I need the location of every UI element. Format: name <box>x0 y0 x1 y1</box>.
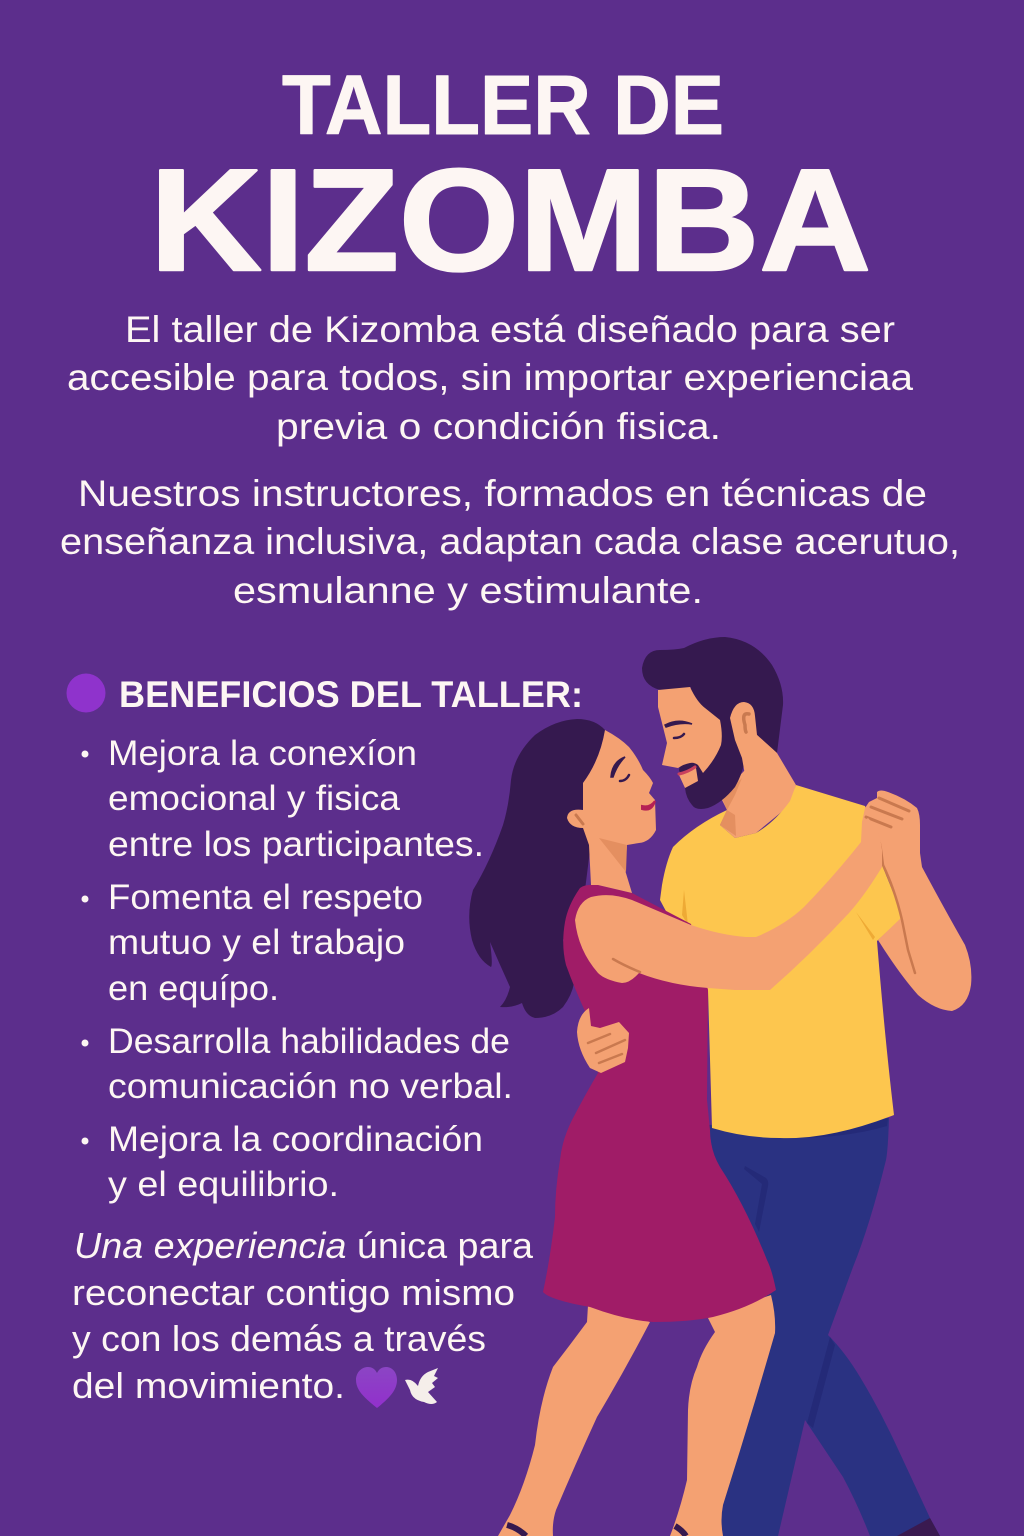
title: TALLER DE <box>282 58 724 152</box>
man's hair and beard <box>642 637 783 809</box>
benefit 3: Desarrolla habilidades de <box>108 1022 510 1061</box>
benefit 2 <box>82 878 423 1008</box>
closing message: Una experiencia única para <box>74 1225 534 1266</box>
icon: purple heart <box>356 1367 397 1408</box>
woman's sandals <box>507 1525 686 1536</box>
woman's arm <box>575 818 882 990</box>
woman's hand on back <box>577 1008 629 1073</box>
closing message: y con los demás a través <box>72 1318 486 1359</box>
woman's face details <box>576 757 655 872</box>
title: KIZOMBA <box>150 139 871 301</box>
man's chin <box>679 768 698 788</box>
man's neck <box>720 712 796 838</box>
benefit 2: en equípo. <box>108 969 279 1008</box>
intro paragraph: accesible para todos, sin importar experienciaa <box>67 357 913 398</box>
benefits heading with purple circle: BENEFICIOS DEL TALLER: <box>119 674 583 715</box>
closing message: del movimiento. <box>72 1365 345 1406</box>
benefit 2: mutuo y el trabajo <box>108 923 405 962</box>
closing message: reconectar contigo mismo <box>72 1272 515 1313</box>
benefit 1: Mejora la conexíon <box>108 734 417 773</box>
intro paragraph: El taller de Kizomba está diseñado para ser <box>125 309 895 350</box>
benefit 4: y el equilibrio. <box>108 1165 339 1204</box>
shirt folds and neck shadow <box>682 778 875 940</box>
man's face details <box>665 714 749 774</box>
icon: white dove <box>405 1368 438 1404</box>
woman's head and neck <box>567 730 656 893</box>
benefit 1 <box>82 734 484 864</box>
benefit 1: entre los participantes. <box>108 825 484 864</box>
man's face <box>658 687 722 773</box>
man's shoe <box>897 1518 940 1536</box>
benefit 3: comunicación no verbal. <box>108 1067 513 1106</box>
benefit 4: Mejora la coordinación <box>108 1120 483 1159</box>
instructors paragraph: esmulanne y estimulante. <box>233 570 703 611</box>
man's yellow t-shirt <box>660 785 903 1138</box>
benefit 2: Fomenta el respeto <box>108 878 423 917</box>
man's trousers <box>708 1118 940 1536</box>
benefit 1: emocional y fisica <box>108 779 401 818</box>
title <box>150 58 871 301</box>
benefit 3 <box>82 1022 513 1106</box>
closing message <box>72 1225 534 1406</box>
instructors paragraph: Nuestros instructores, formados en técnicas de <box>78 473 927 514</box>
instructors paragraph <box>60 473 960 611</box>
benefit 4 <box>82 1120 483 1204</box>
man's ear and neck join <box>730 702 777 775</box>
instructors paragraph: enseñanza inclusiva, adaptan cada clase acerutuo, <box>60 521 960 562</box>
woman's magenta dress <box>543 885 776 1322</box>
intro paragraph <box>67 309 913 447</box>
illustration: dancing couple <box>469 637 971 1536</box>
woman's legs <box>498 1295 775 1536</box>
man's arm and hand <box>862 790 971 1011</box>
woman's back hair <box>469 719 605 1018</box>
intro paragraph: previa o condición fisica. <box>276 406 721 447</box>
